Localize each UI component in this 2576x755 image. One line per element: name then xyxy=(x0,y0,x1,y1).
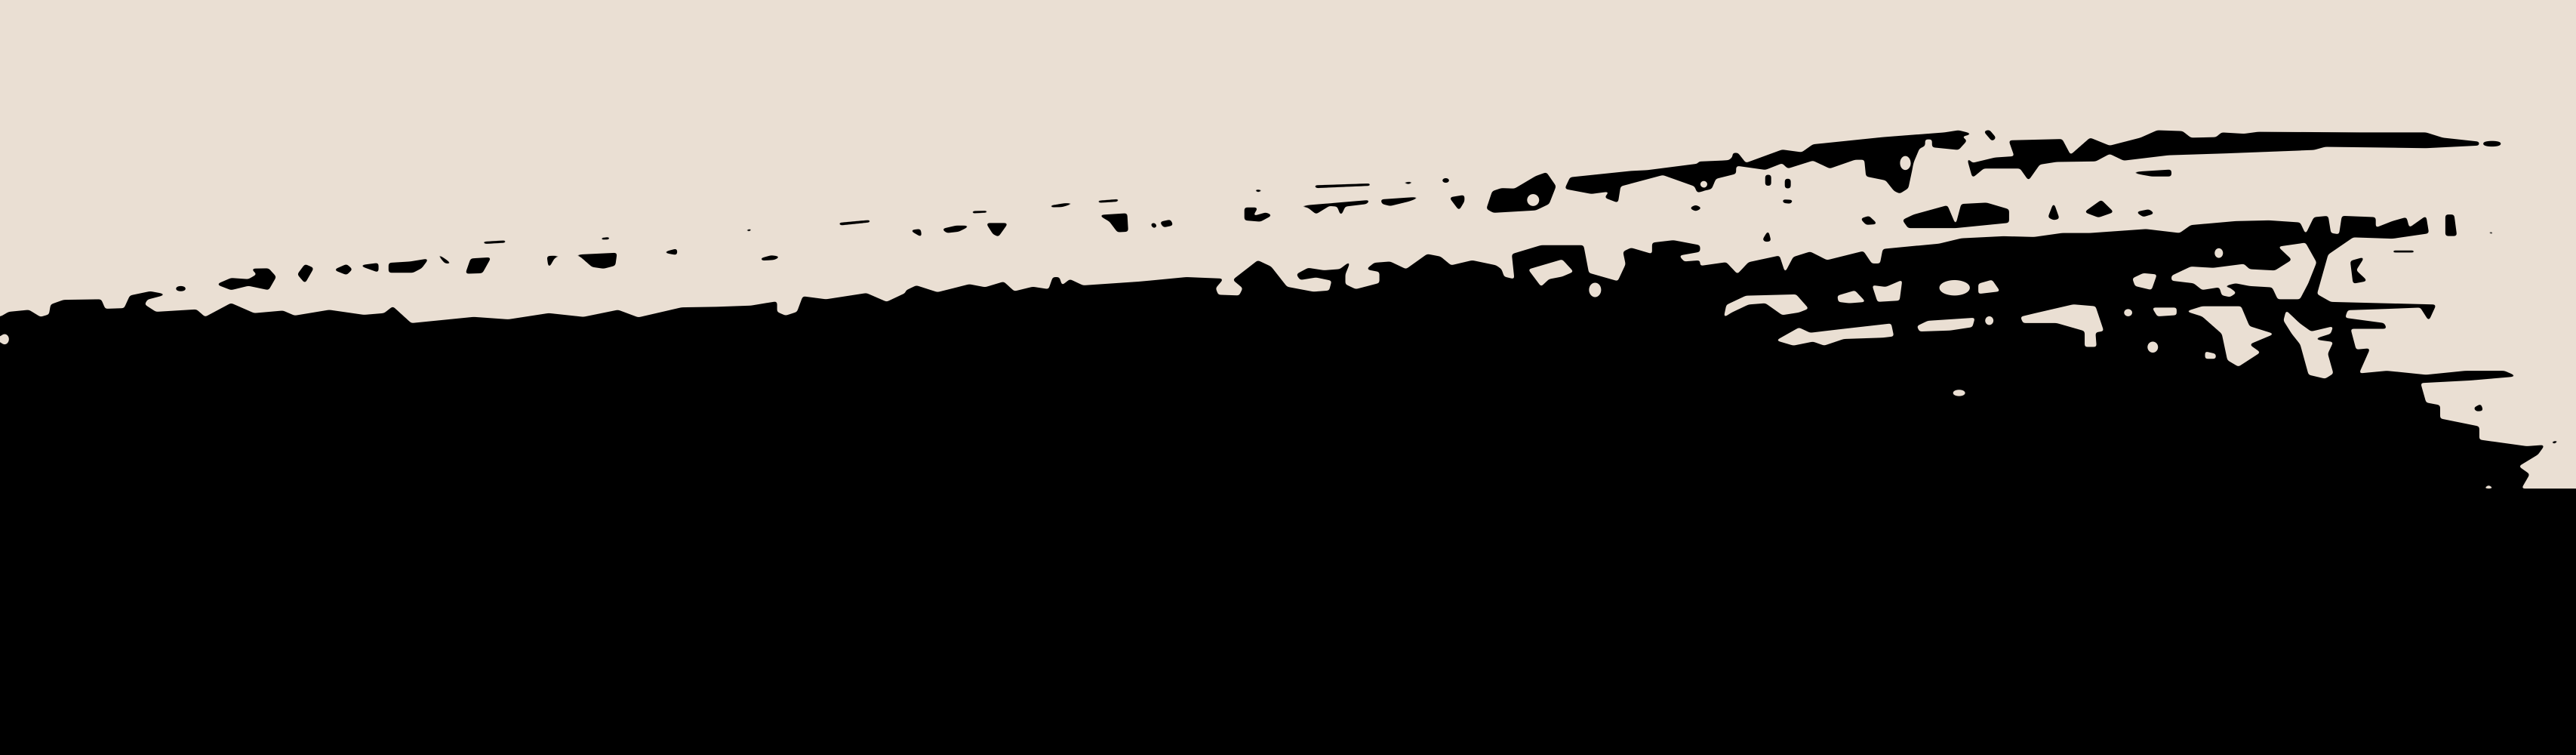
right section of the black brush mass with upper streak and cream gaps xyxy=(1698,130,2576,755)
middle section of the black brush mass with flecks xyxy=(906,153,1736,755)
left section of the black brush mass with flecks xyxy=(0,220,908,755)
